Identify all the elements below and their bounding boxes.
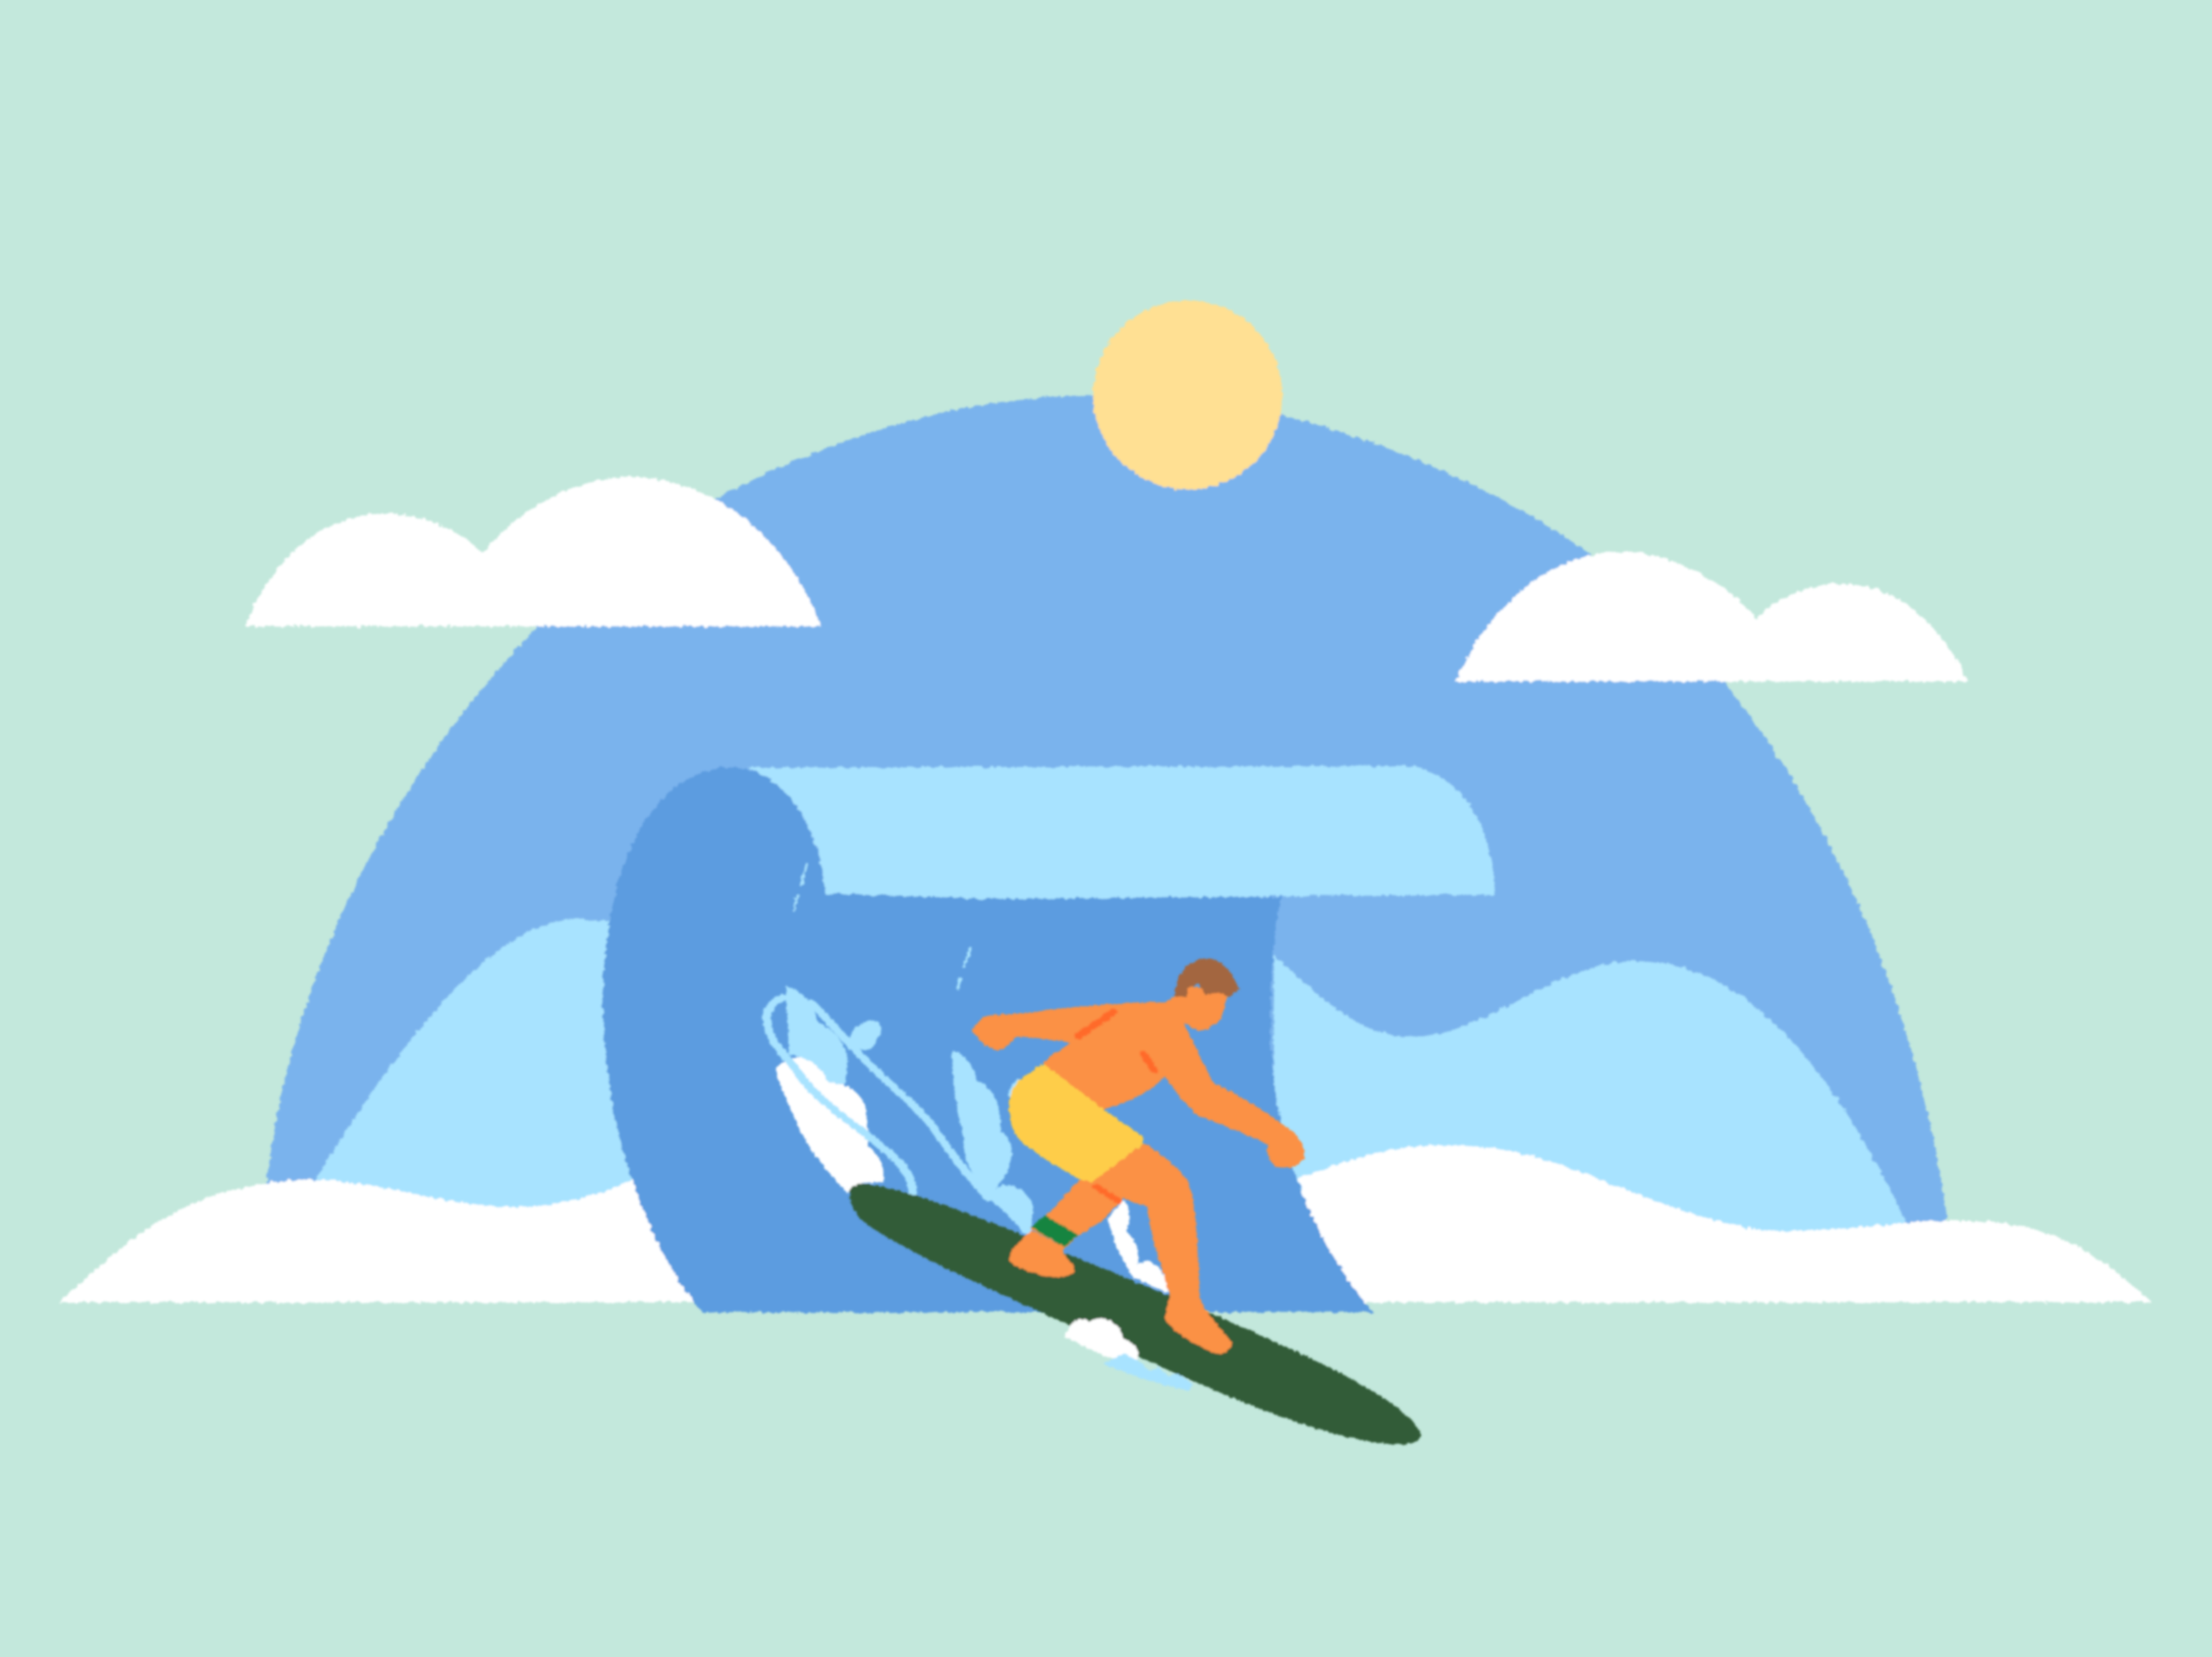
spray: light water beneath board [1103, 1353, 1193, 1391]
sun [1093, 300, 1282, 490]
surfer group [767, 948, 1421, 1444]
foam: right white wave [1298, 1145, 2151, 1302]
surfer: ankle leash [1031, 1216, 1079, 1247]
spray: small droplet [849, 1021, 881, 1051]
foam: left white wave [59, 1178, 720, 1302]
foam: white spray over board edge [1064, 1318, 1138, 1361]
surfer: legs [1031, 1143, 1232, 1353]
surfer: muscle shading marks [1079, 1012, 1154, 1201]
barrel: dark blue curling wave [603, 768, 1372, 1312]
wave: light right swell [1274, 955, 1907, 1256]
spray: looping water trails [767, 948, 989, 1198]
spray: bit behind shorts [1009, 1079, 1026, 1100]
spray streak on barrel [795, 864, 807, 911]
surfboard [850, 1184, 1421, 1444]
foam: white splash behind shin [1108, 1200, 1168, 1293]
scene: sky and waves [59, 300, 2151, 1312]
dome: large blue hill [266, 395, 1947, 1270]
foam: white splash behind board nose [775, 1057, 884, 1194]
surfer: torso, arms and head [972, 986, 1305, 1168]
barrel lip: light blue crest [747, 766, 1496, 899]
cloud: right [1456, 551, 1968, 681]
wave: light left swell [316, 919, 677, 1228]
surfer: hair [1174, 958, 1239, 998]
spray: light plume left [786, 986, 848, 1085]
spray: middle light plume [952, 1051, 1033, 1234]
surfer: back foot [1009, 1230, 1074, 1277]
surfer: yellow shorts [1009, 1063, 1144, 1182]
cloud: left [245, 477, 821, 626]
